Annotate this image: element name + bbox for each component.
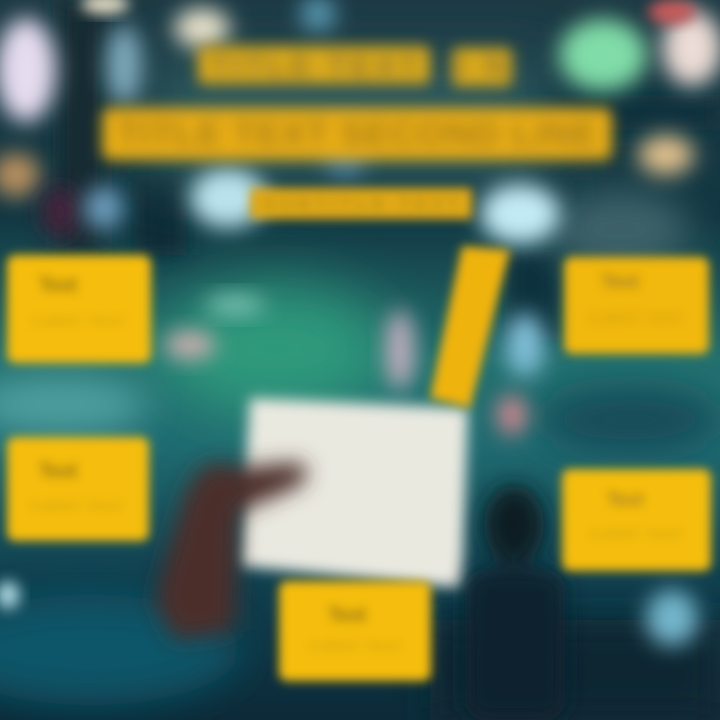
callout: lower left <box>7 437 149 541</box>
hand <box>155 462 307 640</box>
callout: top left <box>7 255 151 363</box>
callout: bottom centre: Label text <box>310 637 400 653</box>
title: first line: IN <box>457 48 507 84</box>
callout: top left: Text <box>38 272 79 297</box>
title: first line <box>198 46 512 86</box>
callout: lower right <box>562 469 711 571</box>
title: second line: TITLE TEXT SECOND LINE <box>117 113 597 154</box>
callout: lower left: Text <box>38 458 79 483</box>
callout: bottom centre: Text <box>327 602 368 627</box>
callout: bottom centre <box>279 581 431 681</box>
callout: top right: Text <box>601 271 639 293</box>
title: first line: TITLE TEXT <box>209 48 419 84</box>
callout: lower left: Label text <box>31 497 121 513</box>
callout: lower right: Label text <box>591 525 681 541</box>
subtitle bar: SUBTITLE TEXT <box>264 194 459 213</box>
callout: lower right: Text <box>606 489 644 511</box>
person silhouette <box>465 485 565 720</box>
hand-held paper <box>240 398 468 588</box>
callout: top right <box>564 257 709 354</box>
callout: top right: Label text <box>591 309 681 325</box>
yellow pencil <box>430 246 510 408</box>
callout: top left: Label text <box>33 312 123 328</box>
subtitle bar <box>250 188 472 219</box>
